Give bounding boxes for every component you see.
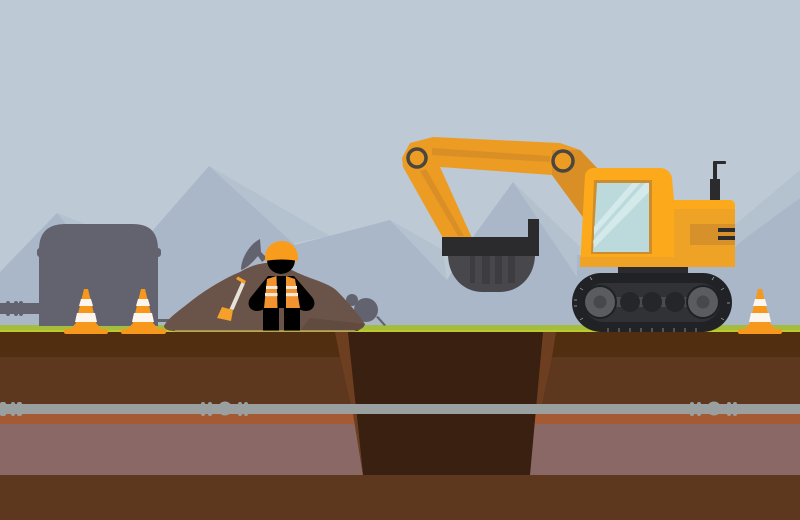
ground layers xyxy=(0,332,800,520)
pile base line xyxy=(175,330,355,332)
worker xyxy=(249,241,314,330)
cab window xyxy=(591,180,652,254)
drive wheel left xyxy=(583,285,617,319)
road wheels xyxy=(620,292,685,312)
worker torso and arms xyxy=(249,276,314,311)
worker legs xyxy=(263,306,279,330)
hard hat xyxy=(265,241,298,261)
grey valve wheel behind pile xyxy=(346,294,386,326)
exhaust stack xyxy=(710,161,726,201)
buried pipe xyxy=(0,402,800,416)
safety vest xyxy=(264,276,300,308)
sky xyxy=(0,0,800,340)
bucket xyxy=(442,219,539,292)
pile shaded edge xyxy=(300,318,365,331)
pipe joint right xyxy=(690,402,737,416)
drive wheel right xyxy=(686,285,720,319)
shovel xyxy=(217,276,246,321)
trench xyxy=(335,332,556,476)
traffic cone 1 xyxy=(64,289,108,334)
dirt pile xyxy=(164,263,365,331)
excavator xyxy=(402,137,735,332)
pipe joint left xyxy=(0,402,22,416)
background mountains xyxy=(0,166,800,330)
traffic cone 3 xyxy=(738,289,782,334)
storage tank xyxy=(0,224,170,326)
grass strip xyxy=(0,325,800,332)
pipe joint middle xyxy=(201,402,248,416)
surface pipe xyxy=(0,303,40,314)
arm pivot right xyxy=(553,151,573,171)
track mount xyxy=(618,267,688,274)
traffic cone 2 xyxy=(121,289,166,334)
grey pick head behind pile xyxy=(241,239,267,270)
worker head xyxy=(267,246,295,274)
crawler track xyxy=(572,273,732,332)
cab and engine body xyxy=(580,168,735,267)
arm pivot left xyxy=(408,149,426,167)
excavator arm xyxy=(402,137,597,238)
track teeth xyxy=(574,277,730,332)
